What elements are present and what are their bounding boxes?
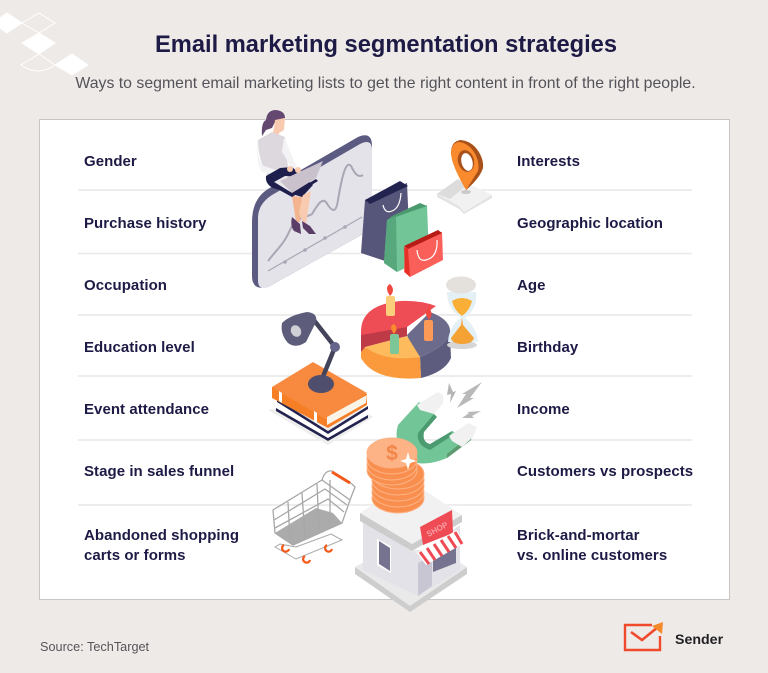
right column labels: Age [517,277,546,294]
left column labels: Abandoned shopping [84,527,239,544]
logo: Sender: Sender [675,632,724,648]
left column labels: Event attendance [84,401,209,418]
icon: coin stack [367,438,424,513]
right column labels: Customers vs prospects [517,463,693,480]
right column labels [517,153,693,564]
icon: woman with laptop [257,110,323,234]
right column labels: Interests [517,153,580,170]
icon: coin stack: $ [386,442,398,465]
decorative diamonds [0,13,88,75]
subtitle: Ways to segment email marketing lists to get the right content in front of the right people. [75,75,696,92]
icon: pie chart with candles [361,284,451,379]
icon: hourglass [446,276,478,349]
logo: Sender [625,622,724,650]
left column labels: Stage in sales funnel [84,463,234,480]
right column labels: Birthday [517,339,579,356]
icon: shop building: SHOP [425,520,450,539]
left column labels: Occupation [84,277,167,294]
icon: shop building [355,492,467,612]
icon: book stack [268,362,373,445]
right column labels: Income [517,401,570,418]
right column labels: Geographic location [517,215,663,232]
icon: shopping bags [361,181,443,277]
left column labels: Purchase history [84,215,207,232]
left column labels: Education level [84,339,195,356]
left column labels: carts or forms [84,547,186,564]
source note: Source: TechTarget [40,640,150,654]
right column labels: vs. online customers [517,547,667,564]
icon: map pin [437,140,492,214]
panel: strategies [40,120,730,600]
left column labels [84,153,239,564]
icon: chart board [252,135,372,288]
icon: shopping cart [273,471,355,563]
title: Email marketing segmentation strategies [155,32,617,58]
icon: desk lamp [282,312,340,393]
icon: horseshoe magnet [396,382,482,464]
right column labels: Brick-and-mortar [517,527,640,544]
left column labels: Gender [84,153,137,170]
